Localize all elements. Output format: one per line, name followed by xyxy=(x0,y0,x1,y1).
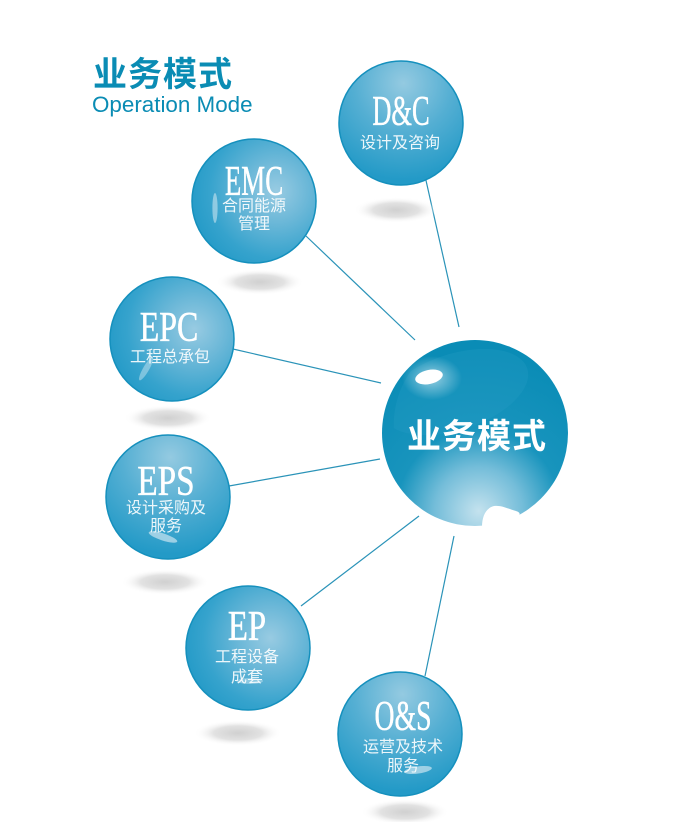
ball xyxy=(110,277,234,401)
label: 业务模式 xyxy=(407,418,547,456)
label: O&S xyxy=(375,692,431,739)
label: EPS xyxy=(137,458,195,505)
description: 运营及技术 xyxy=(363,738,443,756)
highlight xyxy=(237,678,263,684)
ball xyxy=(338,672,462,796)
connector lines xyxy=(229,176,459,676)
highlight xyxy=(404,765,432,775)
upper gloss xyxy=(371,332,539,452)
highlight xyxy=(212,193,218,223)
shadow xyxy=(354,197,438,223)
shadow xyxy=(194,720,282,746)
highlight xyxy=(148,529,178,545)
title xyxy=(92,56,253,117)
label: D&C xyxy=(372,88,430,135)
node: O&S: 服务 xyxy=(387,757,419,775)
highlight xyxy=(414,367,444,387)
node: EPS xyxy=(106,435,230,595)
node: EP xyxy=(186,586,310,746)
ball xyxy=(339,61,463,185)
title: Chinese heading: 业务模式 xyxy=(93,56,233,94)
central sphere xyxy=(371,332,568,527)
shadow xyxy=(124,405,212,431)
node: EPC xyxy=(110,277,234,431)
label: EP xyxy=(228,603,266,650)
title: English subtitle: Operation Mode xyxy=(92,92,253,117)
node: D&C xyxy=(339,61,463,223)
shadow xyxy=(361,799,449,822)
shadow xyxy=(216,269,304,295)
label: EPC xyxy=(140,305,198,351)
node: EP: 成套 xyxy=(231,668,263,686)
node: O&S xyxy=(338,672,462,822)
description: 设计及咨询 xyxy=(360,134,440,152)
glow around highlight xyxy=(402,356,462,400)
ball xyxy=(192,139,316,263)
label: EMC xyxy=(225,158,283,205)
shadow xyxy=(121,569,209,595)
node: EPS: 服务 xyxy=(150,517,182,535)
description: 设计采购及 xyxy=(126,499,206,517)
highlight xyxy=(137,356,155,382)
description: 工程总承包 xyxy=(130,348,210,366)
ball xyxy=(186,586,310,710)
description: 工程设备 xyxy=(215,648,279,666)
bottom white patch xyxy=(482,506,520,527)
node: EMC: 管理 xyxy=(238,215,270,233)
description: 合同能源 xyxy=(222,197,286,215)
node: EMC xyxy=(192,139,316,295)
ball xyxy=(382,340,568,526)
ball xyxy=(106,435,230,559)
